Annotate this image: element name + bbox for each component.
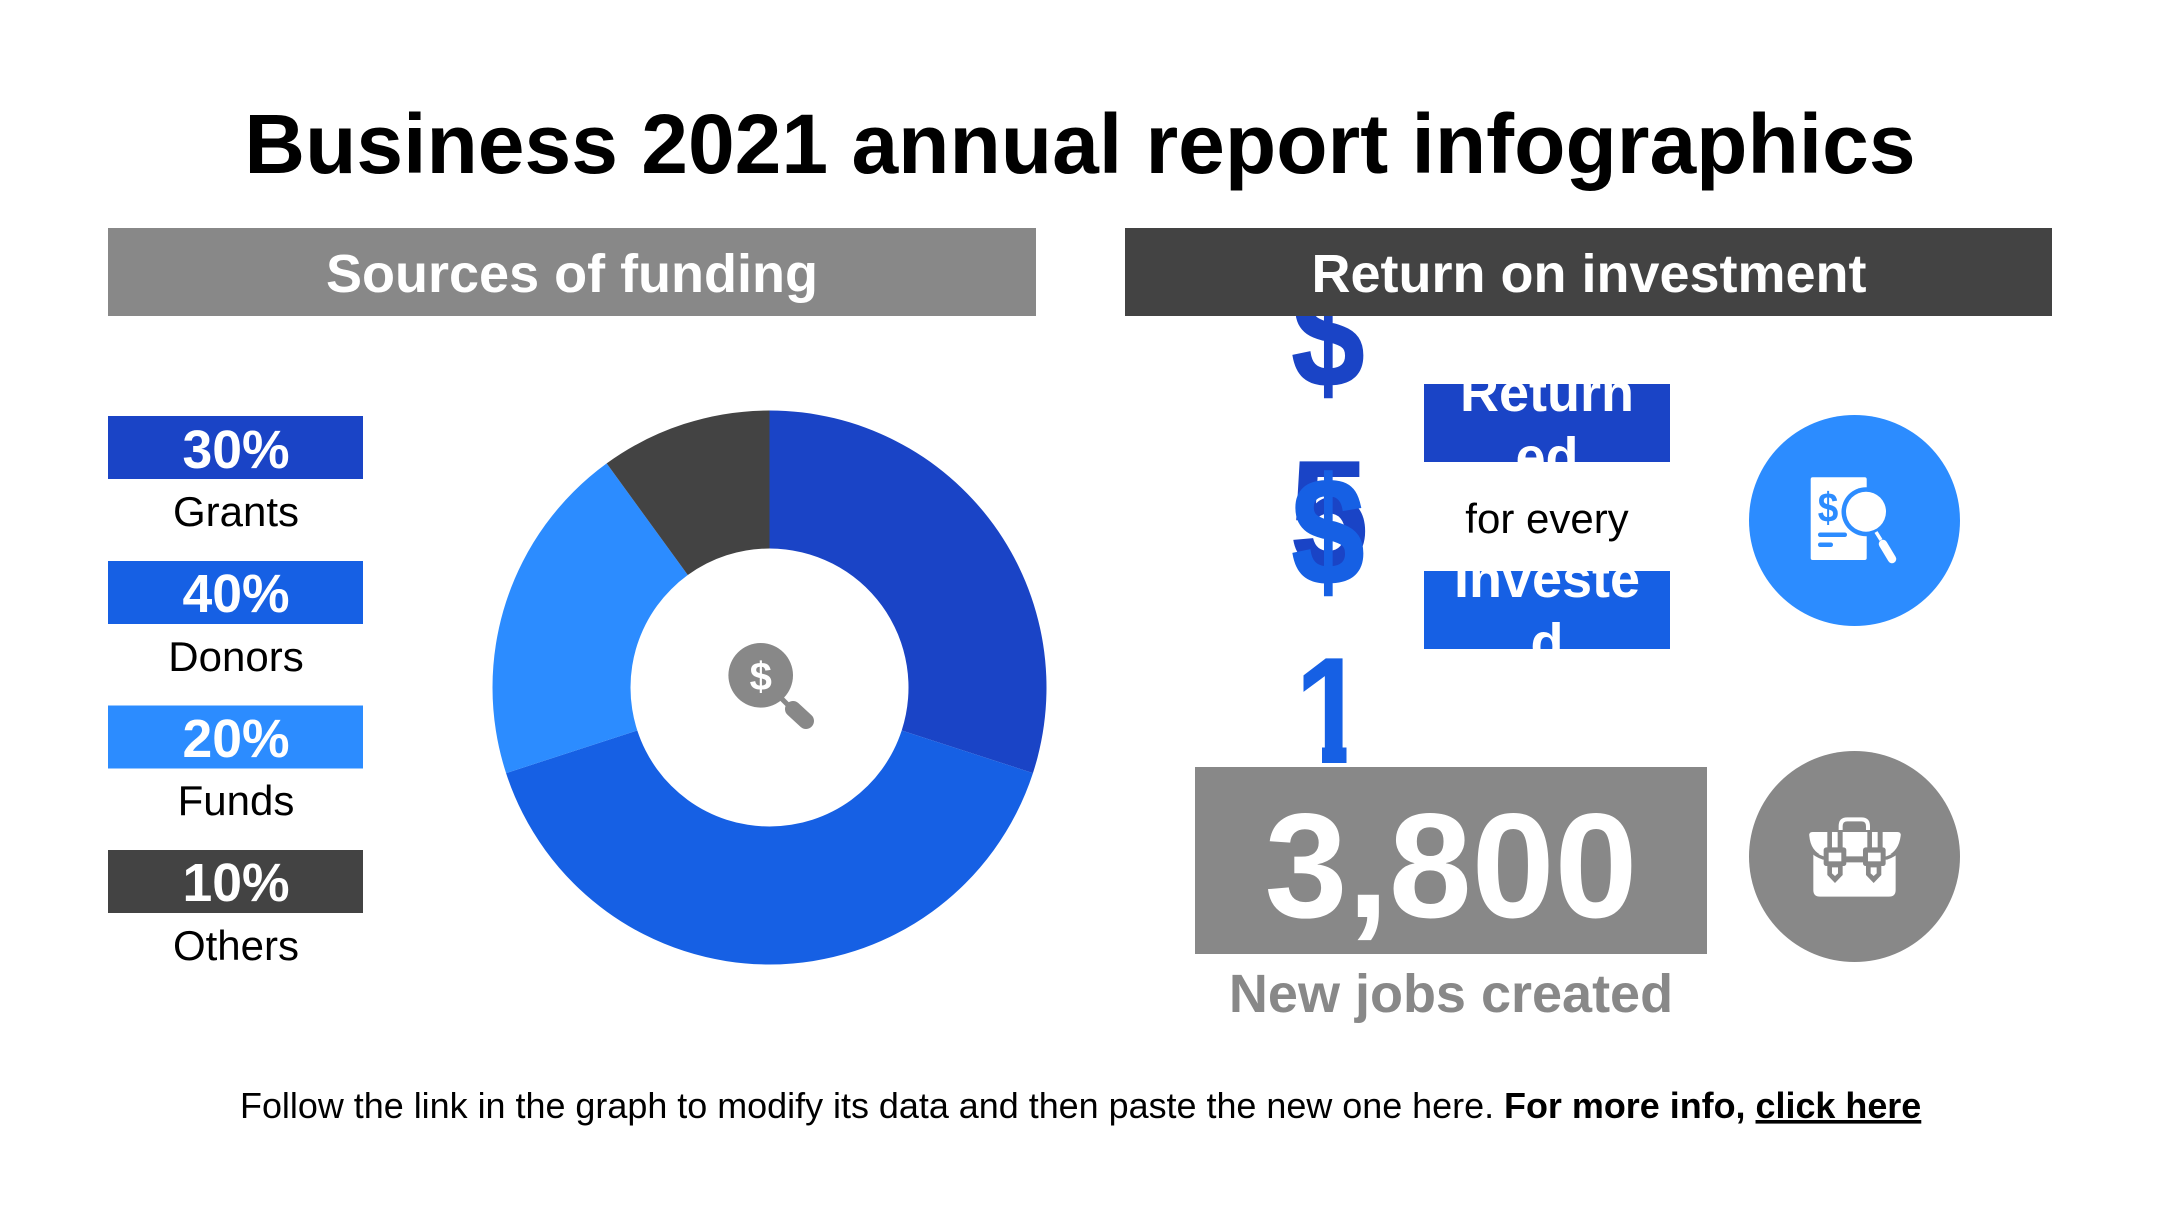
label box: invested: Investe xyxy=(1454,549,1640,609)
panel heading: sources of funding: Sources of funding xyxy=(326,244,818,304)
label box: returned: ed xyxy=(1515,427,1579,487)
stat: 3,800 new jobs: New jobs created xyxy=(1229,964,1673,1024)
icon: magnifier with dollar: $ xyxy=(750,655,772,699)
legend item: others: 10% xyxy=(182,854,290,913)
panel heading: return on investment xyxy=(1125,228,2052,316)
legend item: others: Others xyxy=(173,922,299,969)
stat: 3,800 new jobs: 3,800 xyxy=(1265,782,1637,949)
big figure: $5 returned (overflowing): 5 xyxy=(1289,430,1369,599)
legend item: others xyxy=(108,850,363,969)
legend item: donors xyxy=(108,561,363,680)
legend item: funds xyxy=(108,706,363,824)
donut chart xyxy=(493,410,1046,964)
big figure: $5 returned (overflowing): $ xyxy=(1292,448,1364,617)
legend item: funds: 20% xyxy=(182,710,290,769)
icon: briefcase in grey circle xyxy=(1749,751,1960,962)
stat: 3,800 new jobs xyxy=(1195,767,1707,1024)
icon: document with magnifier in blue circle: $ xyxy=(1818,485,1838,532)
legend item: grants: Grants xyxy=(173,488,299,535)
panel heading: sources of funding xyxy=(108,228,1036,316)
label box: invested xyxy=(1424,571,1670,649)
label box: returned: Return xyxy=(1460,363,1634,423)
legend item: funds: Funds xyxy=(178,777,294,824)
title: Business 2021 annual report infographics xyxy=(244,97,1916,191)
label box: returned xyxy=(1424,384,1670,462)
legend item: grants xyxy=(108,416,363,535)
legend: funding sources xyxy=(108,416,363,969)
icon: document with magnifier in blue circle xyxy=(1749,415,1960,626)
big figure: $5 returned (overflowing): $ xyxy=(1292,250,1364,419)
big figure: $5 returned (overflowing): 1 xyxy=(1295,625,1367,795)
icon: magnifier with dollar xyxy=(728,643,806,721)
label box: invested: d xyxy=(1530,613,1564,673)
panel heading: return on investment: Return on investment xyxy=(1311,244,1867,304)
legend item: grants: 30% xyxy=(182,421,290,480)
text: for every: for every xyxy=(1465,495,1629,542)
legend item: donors: 40% xyxy=(182,565,290,624)
legend item: donors: Donors xyxy=(168,633,304,680)
footer note: Follow the link in the graph to modify its data and then paste the new one here. For more info, click here xyxy=(240,1085,1921,1126)
big figure: $5 returned (overflowing) xyxy=(1292,316,1366,763)
